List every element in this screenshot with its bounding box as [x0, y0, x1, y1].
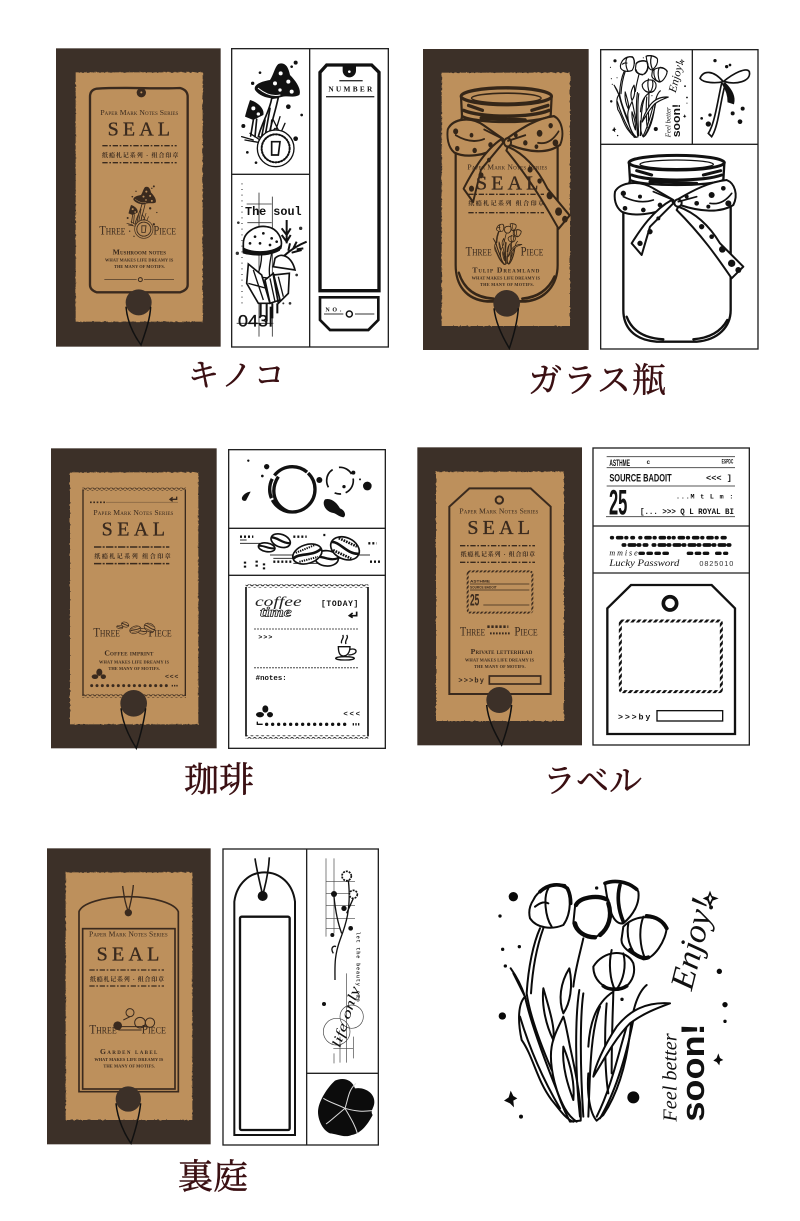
stamp: coffee stains: [242, 459, 372, 517]
stamp: label tag: [607, 585, 735, 734]
stamp: coffee note: #notes:: [256, 675, 287, 683]
kraft card: garden: Paper Mark Notes Series: [89, 930, 168, 939]
stamp: number slip: NO.: [325, 308, 342, 314]
stamp: the soul mushroom: 043: [238, 312, 268, 331]
kraft card: mushroom: SEAL: [108, 119, 170, 141]
kraft card: label: [417, 447, 582, 745]
stamp: the soul mushroom: The soul: [245, 205, 302, 219]
panel: label set: [417, 447, 749, 745]
kraft card: coffee: Paper Mark Notes Series: [93, 508, 174, 517]
text: Enjoy!: Enjoy!: [663, 894, 722, 995]
kraft card: label: Private letterhead: [471, 647, 533, 656]
kraft card: label: SEAL: [467, 517, 530, 539]
kraft card: coffee: Piece: [148, 626, 172, 640]
kraft card: jar: WHAT MAKES LIFE DREAMY IS: [472, 275, 541, 280]
kraft card: garden: Piece: [142, 1022, 166, 1036]
kraft card: garden: SEAL: [97, 944, 159, 966]
heading: 珈琲: 珈琲: [184, 761, 254, 800]
stamp: bookmark tag: [234, 857, 295, 1135]
kraft card: mushroom: Mushroom notes: [113, 247, 166, 256]
stamp: ticket text: ASTHME: [609, 458, 630, 468]
stamp: small tulips: soon!: [671, 104, 683, 137]
stamp: lucky password: mmise: [609, 548, 638, 557]
stamp: lucky password: Lucky Password: [608, 558, 680, 568]
stamp: long flower: let the beauty cap: [355, 932, 361, 1002]
stamp: small tulips: Enjoy!: [667, 60, 686, 95]
stamp: small tulips: Feel better: [666, 107, 673, 138]
kraft card: jar: Three: [466, 245, 492, 259]
stamp sheet: label: [593, 448, 749, 745]
kraft card: mushroom: THE MANY OF MOTIFS.: [114, 264, 165, 269]
kraft card: label: 25: [470, 591, 479, 610]
kraft card: label: THE MANY OF MOTIFS.: [474, 664, 526, 669]
stamp: number tag: NUMBER: [328, 85, 373, 94]
stamp: the soul mushroom: [236, 183, 307, 337]
kraft card: garden: THE MANY OF MOTIFS.: [103, 1064, 155, 1069]
stamp sheet: mushroom: [232, 49, 388, 347]
kraft card: mushroom: WHAT MAKES LIFE DREAMY IS: [105, 257, 174, 262]
stamp: coffee note: time: [260, 605, 292, 620]
kraft card: coffee: <<<: [165, 673, 178, 681]
kraft card: garden: 纸瘾札记系列 · 组合印章: [90, 975, 164, 983]
stamp: ticket text: <<< ]: [706, 474, 732, 484]
kraft card: coffee: WHAT MAKES LIFE DREAMY IS: [99, 659, 170, 664]
stamp: coffee note: [246, 584, 368, 739]
heading: ラベル: ラベル: [543, 764, 642, 800]
kraft card: garden: WHAT MAKES LIFE DREAMY IS: [94, 1057, 164, 1062]
stamp: ticket text: 25: [609, 484, 627, 523]
kraft card: jar: Tulip Dreamland: [472, 265, 540, 274]
kraft card: jar: Paper Mark Notes Series: [467, 162, 548, 171]
stamp: ticket text: ESPDC: [722, 459, 734, 465]
stamp: coffee beans: [240, 531, 380, 570]
stamp: lucky password: 0825010: [699, 559, 733, 568]
kraft card: coffee: THE MANY OF MOTIFS.: [108, 666, 160, 671]
kraft card: coffee: [51, 448, 217, 748]
kraft card: mushroom: 纸瘾札记系列 · 组合印章: [102, 151, 178, 159]
stamp: ticket text: ...M t L m :: [676, 493, 733, 501]
stamp: ticket text: [606, 457, 735, 523]
kraft card: jar: 纸瘾札记系列 组合印章: [468, 199, 544, 207]
stamp: ticket text: [... >>> Q L ROYAL BI: [640, 508, 734, 517]
stamp: coffee note: >>>: [258, 633, 272, 641]
kraft card: coffee: SEAL: [102, 519, 165, 541]
stamp: number tag: [320, 65, 379, 291]
kraft card: coffee: Three: [93, 626, 120, 640]
kraft card: mushroom: [56, 48, 221, 347]
kraft card: mushroom: Piece: [153, 223, 176, 237]
stamp: long flower: life only: [329, 984, 362, 1049]
heading: 裏庭: 裏庭: [178, 1158, 248, 1197]
kraft card: jar: THE MANY OF MOTIFS.: [480, 282, 534, 287]
heading: キノコ: キノコ: [188, 358, 288, 393]
kraft card: label: Paper Mark Notes Series: [459, 506, 539, 515]
kraft card: label: Piece: [514, 625, 538, 639]
kraft card: label: ASTHME: [470, 580, 491, 584]
kraft card: label: SOURCE BADOIT: [470, 585, 497, 589]
text: Feel better: Feel better: [660, 1033, 682, 1123]
panel: garden set: [47, 848, 378, 1145]
kraft card: label: WHAT MAKES LIFE DREAMY IS: [465, 657, 535, 662]
stamp: long flower: [322, 858, 363, 1063]
kraft card: jar: [423, 49, 589, 350]
kraft card: label: 纸瘾札记系列 · 组合印章: [461, 551, 535, 559]
stamp: small tulips: [610, 56, 688, 138]
kraft card: garden: [47, 848, 211, 1144]
panel: coffee set: [51, 448, 385, 748]
panel: tulip stamp close-up: [498, 881, 728, 1123]
kraft card: coffee: 纸瘾札记系列 组合印章: [94, 552, 171, 560]
stamp: coffee note: [TODAY]: [321, 600, 358, 609]
stamp: ticket text: SOURCE BADOIT: [609, 472, 672, 484]
stamp: ribbon bow: [700, 59, 750, 137]
stamp: ticket text: c: [647, 460, 651, 466]
text: soon!: soon!: [675, 1023, 711, 1122]
kraft card: jar: SEAL: [476, 172, 538, 194]
kraft card: mushroom: Three: [99, 223, 126, 237]
stamp: coffee note: <<<: [343, 711, 361, 719]
panel: mushroom set: [56, 48, 388, 347]
stamp sheet: garden: [223, 849, 378, 1145]
stamp: label tag: >>>by: [618, 712, 650, 722]
stamp: coffee note: coffee: [255, 594, 302, 609]
kraft card: garden: Three: [89, 1022, 117, 1036]
stamp: number slip: [320, 297, 378, 330]
kraft card: label: Three: [460, 625, 485, 639]
stamp: black flower: [318, 1079, 374, 1136]
heading: ガラス瓶: ガラス瓶: [528, 362, 667, 400]
stamp sheet: coffee: [229, 450, 385, 748]
stamp sheet: jar: [601, 50, 758, 349]
kraft card: garden: Garden label: [100, 1047, 158, 1056]
kraft card: coffee: Coffee imprint: [104, 649, 154, 658]
stamp: lucky password: [608, 538, 733, 568]
kraft card: label: >>>by: [458, 678, 485, 686]
kraft card: jar: Piece: [521, 245, 544, 259]
panel: glass jar set: [423, 49, 758, 350]
kraft card: mushroom: Paper Mark Notes Series: [100, 108, 179, 117]
